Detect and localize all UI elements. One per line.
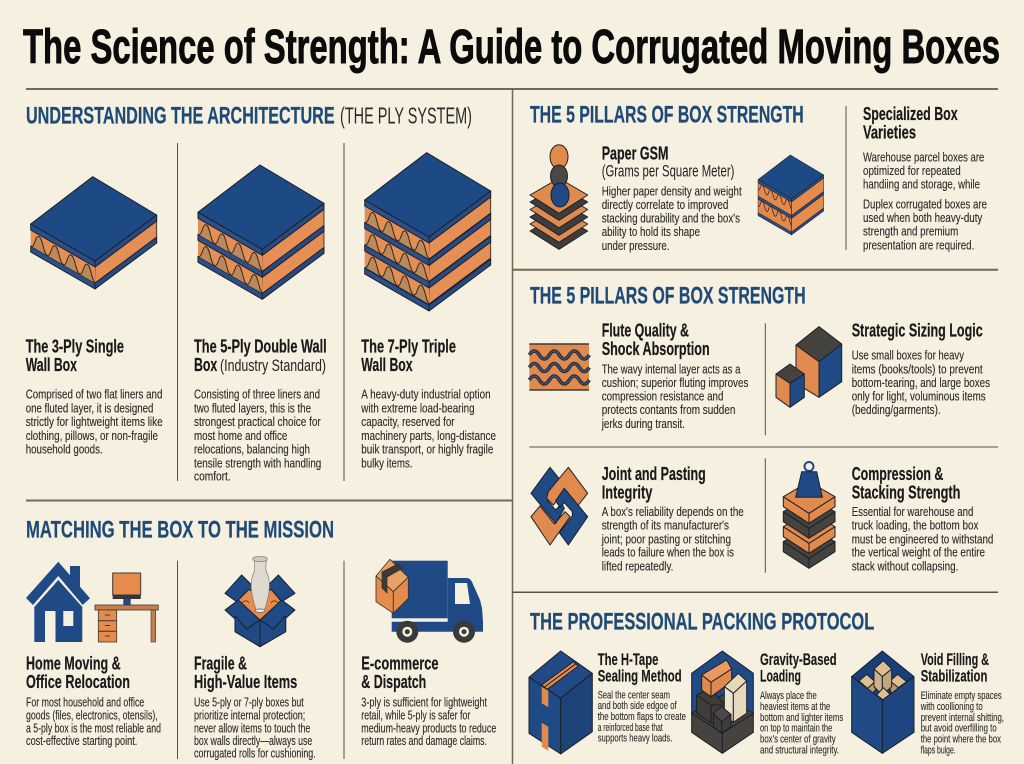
panel: e-commerce: [361, 559, 496, 748]
heading: 3-ply: The 3-Ply Single: [26, 337, 124, 357]
text: H-tape: and both side edgoe of: [598, 700, 677, 712]
panel: fragile items: [194, 556, 316, 761]
text: e-commerce: 3-ply is sufficient for lightweight: [361, 696, 487, 710]
text: home moving: [26, 696, 161, 748]
text: fragile items: never allow items to touch the: [194, 721, 310, 735]
heading: gravity loading: Gravity-Based: [760, 650, 837, 669]
text: void filling: [920, 690, 1004, 756]
heading: e-commerce: & Dispatch: [361, 672, 426, 692]
text: gravity loading: bottom and lighter items: [760, 712, 844, 724]
heading: flute quality: [602, 321, 710, 359]
heading: compression strength: Stacking Strength: [852, 482, 960, 502]
heading: fragile items: [194, 653, 297, 692]
text: fragile items: prioritize internal protection;: [194, 708, 305, 722]
text: flute quality: jerks during transit.: [601, 417, 685, 431]
heading: gravity loading: [760, 650, 837, 686]
text: e-commerce: [361, 696, 496, 748]
text: flute quality: cushion; superior fluting improves: [602, 376, 748, 390]
text: 5-ply: comfort.: [194, 470, 231, 484]
panel: flute quality: [529, 321, 748, 431]
text: 5-ply: relocations, balancing high: [194, 442, 310, 456]
text: strategic sizing: Use small boxes for heavy: [852, 348, 965, 362]
text: paper GSM: Higher paper density and weight: [602, 184, 742, 198]
heading: professional packing protocol: THE PROFESSIONAL PACKING PROTOCOL: [530, 608, 874, 635]
text: 7-ply: buik transport, or highly fragile: [361, 442, 493, 456]
panel: specialized box varieties: [863, 104, 987, 252]
heading: flute quality: Shock Absorption: [602, 339, 710, 359]
text: joint integrity: [601, 505, 744, 574]
text: gravity loading: on top to maintain the: [760, 723, 832, 735]
heading: 5 pillars middle: THE 5 PILLARS OF BOX STRENGTH: [530, 282, 806, 309]
icon: box with heavy items at bottom: [692, 651, 753, 753]
icon: interlocked joint: [531, 467, 588, 545]
heading: specialized: Specialized Box: [863, 104, 958, 124]
icon: weight on stacked boxes: [783, 462, 835, 568]
heading: void filling: [921, 650, 989, 686]
text: strategic sizing: (bedding/garments).: [852, 403, 941, 417]
panel: 5-ply: [194, 165, 327, 484]
heading: 7-ply: The 7-Ply Triple: [361, 337, 456, 357]
panel: compression strength: [783, 462, 993, 574]
heading: void filling: Stabilization: [921, 667, 987, 686]
text: 3-ply: household goods.: [26, 442, 103, 456]
heading: H-tape: [598, 650, 682, 686]
text: H-tape: supports heavy loads.: [598, 733, 672, 745]
panel: paper GSM: [530, 143, 824, 253]
text: 3-ply: [26, 388, 163, 456]
text: paper GSM: stacking durability and the box's: [602, 212, 740, 226]
text: fragile items: Use 5-ply or 7-ply boxes but: [194, 696, 304, 710]
text: 5-ply: two fluted layers, this is the: [194, 402, 311, 416]
text: specialized: optimized for repeated: [863, 164, 961, 178]
text: home moving: For most household and office: [26, 696, 144, 710]
panel: void filling: [852, 650, 1004, 756]
heading: home moving: Office Relocation: [26, 672, 130, 692]
icon: truck with parcel: [376, 559, 483, 643]
heading: 5-ply: Box: [194, 355, 217, 375]
heading: compression strength: [852, 464, 960, 502]
heading: 7-ply: [361, 337, 456, 375]
text: 3-ply: one fluted layer, it is designed: [26, 402, 153, 416]
icon: 5-ply board: [198, 165, 324, 299]
text: e-commerce: medium-heavy products to reduce: [361, 721, 496, 735]
text: H-tape: [598, 689, 686, 745]
text: paper GSM: ability to hold its shape: [602, 225, 700, 239]
heading: understanding the architecture: (THE PLY SYSTEM): [340, 102, 472, 128]
heading: 5-ply: [194, 337, 327, 375]
panel: H-tape: [529, 650, 686, 754]
text: specialized: handiing and storage, while: [863, 178, 980, 192]
text: fragile items: box walls directly—always use: [194, 734, 312, 748]
text: 3-ply: clothing, pillows, or non-fragile: [26, 429, 158, 443]
text: compression strength: truck loading, the bottom box: [852, 519, 979, 533]
text: paper GSM: under pressure.: [602, 239, 669, 253]
heading: flute quality: Flute Quality &: [602, 321, 689, 341]
icon: small double wall board: [758, 155, 824, 235]
text: void filling: flaps bulge.: [921, 744, 956, 756]
heading: paper GSM: [602, 143, 734, 181]
text: H-tape: a reinforced base that: [598, 722, 663, 734]
heading: fragile items: High-Value Items: [194, 672, 297, 692]
icon: open box with vase: [225, 556, 295, 647]
text: 5-ply: tensile strength with handling: [194, 456, 321, 470]
heading: understanding the architecture: UNDERSTANDING THE ARCHITECTURE: [26, 102, 335, 129]
text: joint integrity: joint; poor pasting or stitching: [601, 532, 731, 546]
text: specialized: [863, 150, 987, 252]
panel: joint integrity: [531, 464, 744, 574]
icon: 7-ply board: [365, 153, 491, 311]
heading: e-commerce: E-commerce: [361, 653, 439, 673]
text: fragile items: corrugated rolls for cushioning.: [194, 747, 316, 761]
text: fragile items: [194, 696, 316, 761]
text: 5-ply: most home and office: [194, 429, 287, 443]
text: 5-ply: Consisting of three liners and: [194, 388, 320, 402]
text: compression strength: Essential for warehouse and: [852, 505, 973, 519]
text: flute quality: protects contants from sudden: [602, 403, 735, 417]
heading: specialized: [863, 104, 958, 143]
text: void filling: with coollioning to: [920, 701, 983, 713]
text: specialized: strength and premium: [863, 225, 958, 239]
heading: compression strength: Compression &: [852, 464, 943, 484]
text: flute quality: [601, 362, 748, 431]
text: 7-ply: A heavy-duty industrial option: [361, 388, 491, 402]
text: e-commerce: retail, while 5-ply is safer for: [361, 708, 470, 722]
heading: matching the box to the mission: MATCHING THE BOX TO THE MISSION: [26, 516, 334, 543]
text: specialized: Duplex corrugated boxes are: [863, 197, 987, 211]
panel: strategic sizing: [776, 321, 990, 417]
text: 7-ply: machinery parts, long-distance: [361, 429, 496, 443]
text: strategic sizing: only for light, voluminous items: [852, 390, 986, 404]
text: strategic sizing: [852, 348, 990, 417]
heading: specialized: Varieties: [863, 123, 916, 143]
heading: joint integrity: Joint and Pasting: [602, 464, 706, 484]
heading: 5-ply: (Industry Standard): [220, 356, 326, 375]
icon: house and desk: [26, 562, 158, 642]
heading: paper GSM: (Grams per Square Meter): [602, 162, 734, 181]
text: home moving: goods (files, electronics, otensils),: [26, 708, 158, 722]
icon: wavy flute: [529, 344, 589, 390]
panel: gravity loading: [692, 650, 844, 756]
heading: home moving: [26, 653, 130, 692]
heading: home moving: Home Moving &: [26, 653, 121, 673]
icon: large and small cubes: [776, 327, 842, 407]
text: 7-ply: capacity, reserved for: [361, 415, 455, 429]
text: H-tape: the bottom flaps to create: [598, 711, 686, 723]
panel: 3-ply: [26, 177, 163, 456]
text: joint integrity: lifted repeatedly.: [602, 560, 673, 574]
panel: home moving: [26, 562, 161, 748]
text: gravity loading: [760, 690, 844, 756]
heading: paper GSM: Paper GSM: [602, 143, 668, 163]
heading: 5-ply: The 5-Ply Double Wall: [194, 337, 327, 357]
heading: 5 pillars top: THE 5 PILLARS OF BOX STRENGTH: [530, 102, 804, 129]
heading: H-tape: The H-Tape: [598, 650, 658, 669]
text: 3-ply: Comprised of two flat liners and: [26, 388, 162, 402]
heading: e-commerce: [361, 653, 439, 692]
text: void filling: but avoid overfilling to: [921, 723, 997, 735]
icon: 3-ply board: [31, 177, 157, 289]
text: 7-ply: bulky items.: [361, 456, 413, 470]
panel: 7-ply: [361, 153, 496, 470]
heading: fragile items: Fragile &: [194, 653, 247, 673]
text: strategic sizing: items (books/tools) to prevent: [852, 362, 983, 376]
text: home moving: a 5-ply box is the most reliable and: [26, 721, 161, 735]
text: 7-ply: with extreme load-bearing: [361, 402, 475, 416]
text: flute quality: compression resistance and: [602, 390, 723, 404]
icon: box with fill blocks: [852, 651, 914, 753]
text: 5-ply: [194, 388, 321, 484]
heading: 7-ply: Wall Box: [361, 355, 413, 375]
text: joint integrity: leads to failure when the box is: [602, 546, 734, 560]
heading: 3-ply: [26, 337, 124, 375]
text: compression strength: the vertical weight of the entire: [852, 546, 985, 560]
heading: H-tape: Sealing Method: [598, 667, 682, 686]
text: 7-ply: [361, 388, 496, 470]
text: joint integrity: A box's reliability depends on the: [602, 505, 744, 519]
text: e-commerce: return rates and damage claims.: [361, 734, 487, 748]
text: joint integrity: strength of its manufacturer's: [602, 519, 729, 533]
text: paper GSM: [602, 184, 742, 253]
text: gravity loading: heaviest items at the: [760, 701, 830, 713]
text: 5-ply: strongest practical choice for: [194, 415, 321, 429]
text: compression strength: stack without collapsing.: [852, 560, 958, 574]
icon: GSM stack with spheres: [530, 145, 588, 249]
text: gravity loading: Always place the: [760, 690, 817, 702]
heading: joint integrity: [602, 464, 706, 502]
heading: joint integrity: Integrity: [602, 482, 652, 502]
heading: 3-ply: Wall Box: [26, 355, 77, 375]
text: specialized: presentation are required.: [863, 238, 974, 252]
text: 3-ply: strictly for lightweight items like: [26, 415, 163, 429]
text: specialized: Warehouse parcel boxes are: [863, 150, 984, 164]
text: gravity loading: box's center of gravity: [760, 734, 836, 746]
text: specialized: used when both heavy-duty: [863, 211, 983, 225]
heading: gravity loading: Loading: [760, 667, 801, 686]
text: H-tape: Seal the center seam: [598, 689, 670, 701]
text: flute quality: The wavy internal layer acts as a: [602, 362, 740, 376]
icon: taped box: [529, 651, 592, 754]
text: paper GSM: directly correlate to improved: [602, 198, 728, 212]
text: home moving: cost-effective starting point.: [26, 734, 137, 748]
text: compression strength: [852, 505, 993, 574]
text: gravity loading: and structural integrity.: [760, 744, 839, 756]
